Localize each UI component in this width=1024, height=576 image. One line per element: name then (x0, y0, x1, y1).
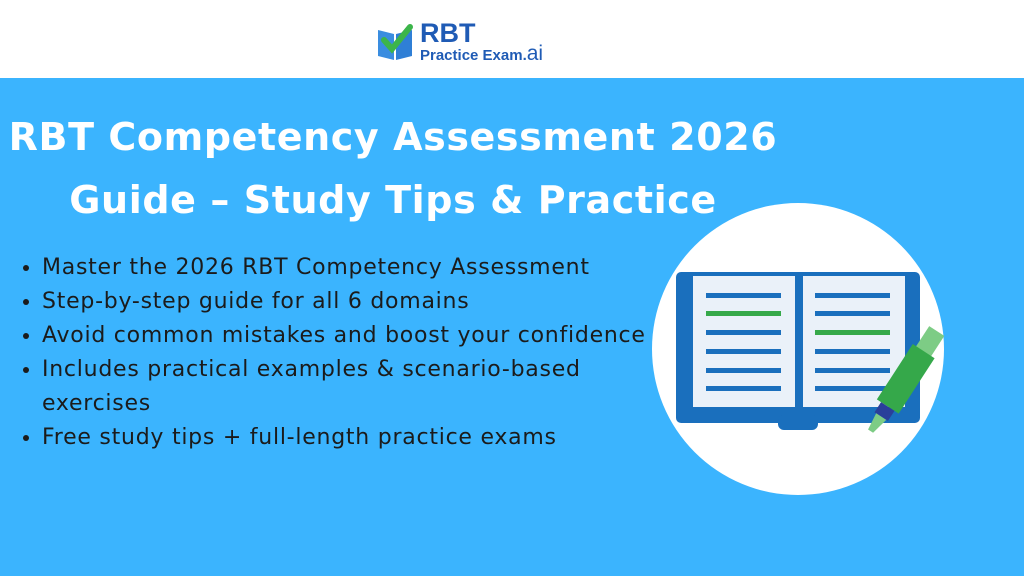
bullet list: Step-by-step guide for all 6 domains (42, 289, 469, 314)
bullet list: Master the 2026 RBT Competency Assessment (42, 255, 590, 280)
title (9, 115, 777, 222)
bullet list: Avoid common mistakes and boost your confidence (42, 323, 646, 348)
logo (378, 18, 543, 65)
title: RBT Competency Assessment 2026 (9, 115, 777, 159)
logo: RBT (420, 18, 476, 48)
title: Guide – Study Tips & Practice (69, 178, 717, 222)
bullet list (23, 255, 646, 450)
bullet list: Includes practical examples & scenario-based exercises (42, 357, 581, 416)
header logo bar (0, 0, 1024, 78)
bullet list: Free study tips + full-length practice exams (42, 425, 557, 450)
logo: Practice Exam.ai (420, 42, 543, 65)
